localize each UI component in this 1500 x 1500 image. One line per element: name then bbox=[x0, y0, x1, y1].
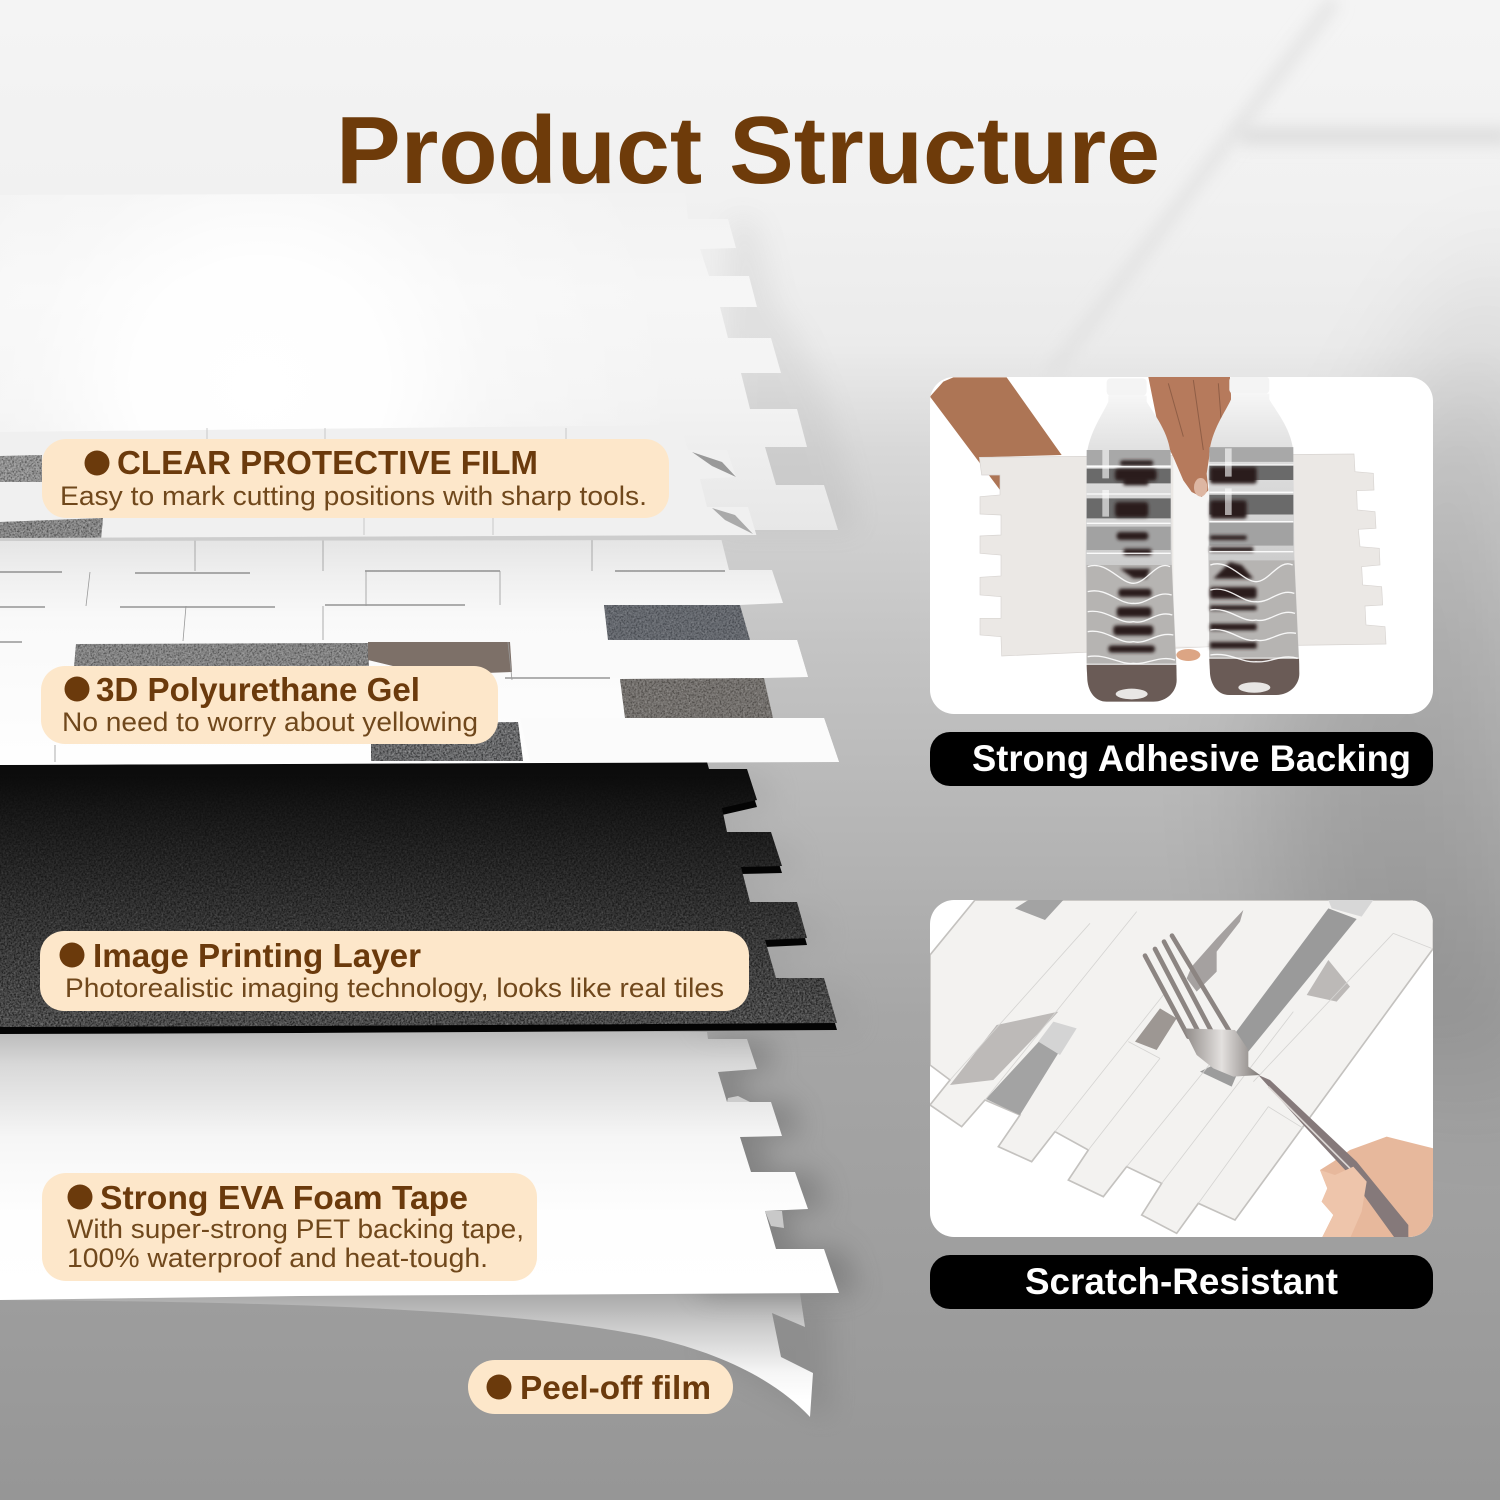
label bar: scratch-resistant bbox=[930, 1255, 1433, 1309]
panel: strong adhesive backing photo bbox=[930, 377, 1433, 714]
callout: strong EVA foam tape bbox=[42, 1173, 537, 1281]
dark tiles bbox=[72, 605, 773, 761]
fork bbox=[1145, 936, 1408, 1238]
layer: peel-off film bbox=[0, 1293, 830, 1420]
layer: EVA foam tape bbox=[0, 1030, 859, 1300]
layer: top clear film with teeth bbox=[0, 193, 858, 530]
tile strips bbox=[930, 900, 1433, 1233]
label bar: strong adhesive backing bbox=[930, 732, 1433, 786]
layer: marble tile panel bbox=[0, 538, 839, 765]
thumb bbox=[1320, 1167, 1367, 1238]
callout: strong EVA foam tape: With super-strong PET backing tape, bbox=[67, 1214, 524, 1244]
callout: clear protective film: Easy to mark cutting positions with sharp tools. bbox=[60, 481, 647, 511]
label bar: scratch-resistant: Scratch-Resistant bbox=[1025, 1261, 1338, 1302]
callout: peel-off film: Peel-off film bbox=[520, 1369, 711, 1406]
callout: image printing layer: Image Printing Layer bbox=[93, 937, 421, 974]
callout: peel-off film bbox=[468, 1360, 733, 1414]
strip joints bbox=[950, 912, 1432, 1203]
callout: strong EVA foam tape: Strong EVA Foam Tape bbox=[100, 1179, 468, 1216]
callout: strong EVA foam tape: 100% waterproof and heat-tough. bbox=[67, 1243, 488, 1273]
hand bbox=[1148, 377, 1232, 497]
hand holding fork bbox=[1320, 1137, 1433, 1238]
metal strips bbox=[1015, 900, 1063, 920]
water bottle left bbox=[1086, 378, 1177, 702]
callout: 3D polyurethane gel: 3D Polyurethane Gel bbox=[96, 671, 420, 708]
label bar: strong adhesive backing: Strong Adhesive Backing bbox=[972, 738, 1411, 779]
layer: image printing layer (black) bbox=[0, 762, 857, 1034]
callout: 3D polyurethane gel: No need to worry about yellowing bbox=[62, 707, 478, 737]
marble veins bbox=[1187, 910, 1243, 992]
callout: image printing layer: Photorealistic imaging technology, looks like real tiles bbox=[65, 973, 724, 1003]
water bottle right bbox=[1208, 377, 1299, 695]
panel: scratch-resistant photo bbox=[930, 900, 1433, 1238]
layer: top marble row bbox=[0, 425, 757, 541]
callout: 3D polyurethane gel bbox=[41, 666, 498, 744]
callout: image printing layer bbox=[40, 931, 749, 1011]
tile held up bbox=[979, 454, 1386, 656]
callout: clear protective film bbox=[42, 439, 669, 518]
arm bbox=[930, 377, 1062, 490]
callout: clear protective film: CLEAR PROTECTIVE FILM bbox=[117, 444, 538, 481]
title: Product Structure bbox=[336, 97, 1160, 204]
grout lines bbox=[0, 539, 725, 762]
